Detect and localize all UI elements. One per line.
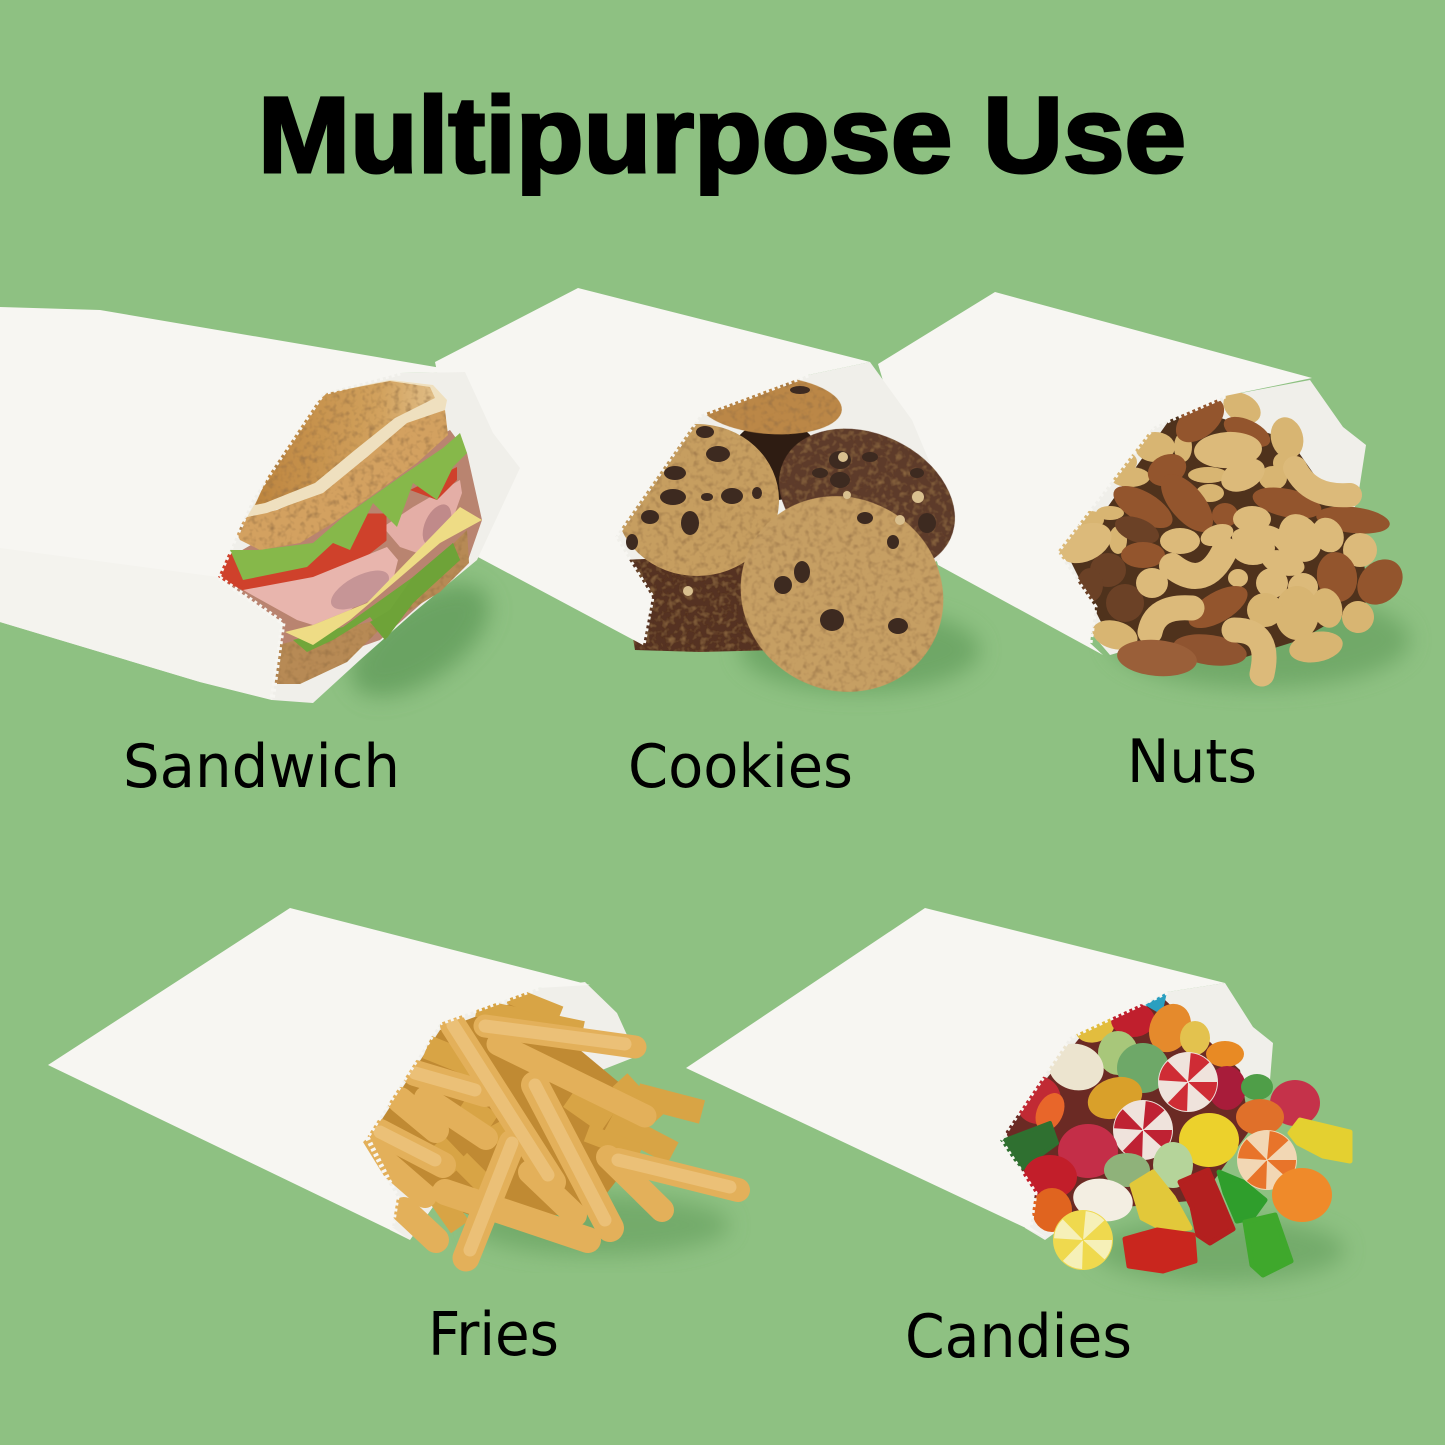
bag front: nuts [878, 292, 1312, 655]
panel: fries [48, 908, 738, 1258]
food shadow: sandwich [332, 561, 508, 719]
food: cookies [615, 371, 979, 729]
toast top [247, 380, 447, 517]
peppermint candy [1113, 1100, 1173, 1160]
orange swirl candy [1237, 1130, 1297, 1190]
bag back: candies [995, 983, 1273, 1240]
bag front: candies [686, 908, 1225, 1238]
food: sandwich [215, 380, 482, 684]
upper lettuce [230, 433, 467, 580]
lower ham [243, 547, 398, 625]
food: mixed nuts [1052, 386, 1412, 679]
chocolate cookie bottom [620, 555, 775, 652]
peanuts and cashew pieces [1052, 430, 1377, 601]
title: Multipurpose Use [258, 74, 1186, 195]
bag front: fries [48, 908, 590, 1238]
lower lettuce [293, 543, 460, 652]
chip cookie [615, 424, 779, 576]
sandwich filler base [215, 430, 482, 668]
yellow swirl candy [1053, 1210, 1113, 1270]
panel: nuts [878, 292, 1412, 688]
label: Cookies: Cookies [628, 732, 853, 802]
upper ham [383, 480, 462, 555]
peppermint candy [1158, 1052, 1218, 1112]
food: candies [1000, 992, 1350, 1275]
bag back: sandwich [212, 372, 520, 703]
bag back: fries [358, 982, 640, 1240]
bag back: cookies [610, 362, 940, 648]
label: Nuts: Nuts [1127, 727, 1257, 797]
label: Fries: Fries [428, 1300, 559, 1370]
label: Sandwich: Sandwich [123, 732, 400, 802]
panel: candies [686, 908, 1350, 1282]
food shadow: candies [1095, 1218, 1345, 1282]
oatmeal cookie [705, 459, 979, 729]
top cookie [696, 371, 844, 439]
panel: sandwich [0, 307, 520, 719]
food shadow: nuts [1110, 592, 1410, 688]
bag front: sandwich [0, 307, 465, 700]
bag back: nuts [1050, 380, 1366, 655]
darker back layer [375, 1000, 640, 1215]
bag front: cookies [435, 288, 870, 645]
chocolate cookie right [756, 401, 978, 599]
food: french fries [372, 995, 738, 1258]
panel: cookies [435, 288, 980, 729]
food shadow: cookies [740, 608, 980, 692]
dark gap between cookies [730, 420, 820, 500]
toast crust [235, 410, 448, 550]
label: Candies: Candies [905, 1302, 1132, 1372]
bottom bread [272, 530, 469, 684]
tomato [218, 515, 385, 592]
food shadow: fries [470, 1195, 730, 1255]
cheese [285, 507, 482, 645]
